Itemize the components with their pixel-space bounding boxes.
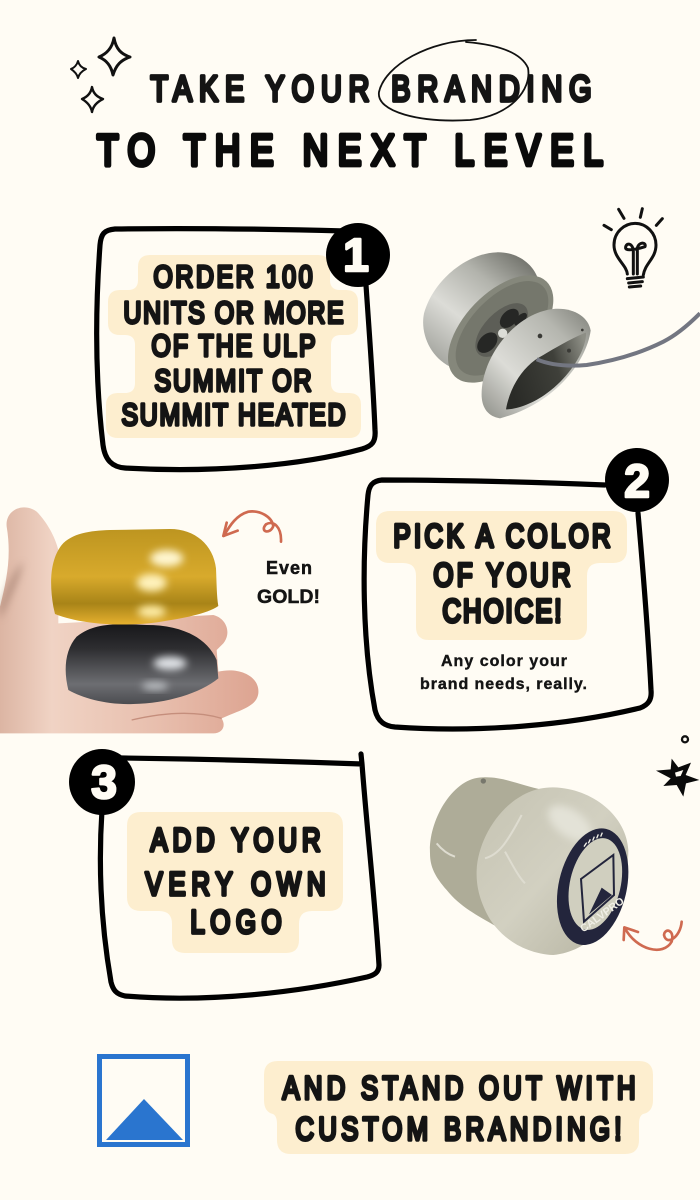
- step 2 text: OF YOUR: [434, 558, 571, 594]
- caption: even gold: Even: [266, 558, 312, 578]
- panel: step 3: [69, 749, 379, 998]
- text highlight: step 3: [127, 812, 343, 953]
- step 1 text: UNITS OR MORE: [124, 295, 344, 330]
- title: TO THE NEXT LEVEL: [97, 126, 603, 175]
- step 1 text: SUMMIT HEATED: [122, 397, 346, 432]
- step 3 text: [146, 823, 326, 941]
- number badge 2: [605, 448, 669, 512]
- icon: sparkles: [71, 38, 130, 112]
- step 1 text: OF THE ULP: [152, 328, 316, 363]
- icon: star and dot: [656, 736, 699, 797]
- step 2 text: [394, 519, 611, 630]
- step 2 text: PICK A COLOR: [394, 519, 611, 555]
- step 1 outline: [97, 229, 375, 470]
- panel: step 1: [97, 223, 390, 470]
- step 3 text: VERY OWN: [146, 867, 325, 903]
- arrow: to gold yoyo: [223, 511, 281, 542]
- step 2 caption: [420, 653, 587, 693]
- number badge 1: 1: [343, 229, 369, 281]
- step 2 caption: brand needs, really.: [420, 676, 587, 693]
- step 2 outline: [364, 480, 651, 729]
- number badge 3: [69, 749, 135, 815]
- closing message text: AND STAND OUT WITH: [282, 1071, 636, 1107]
- step 2 text: CHOICE!: [442, 594, 562, 630]
- text highlight: closing message: [264, 1061, 653, 1154]
- caption: even gold: [257, 558, 320, 608]
- logo: blue square with triangle: [100, 1056, 188, 1144]
- icon: lightbulb: [604, 209, 662, 287]
- closing message text: [282, 1071, 636, 1148]
- caption: even gold: GOLD!: [257, 586, 320, 608]
- image: disassembled yoyo with cable: [423, 252, 700, 418]
- step 1 text: ORDER 100: [154, 259, 313, 294]
- number badge 3: 3: [91, 756, 117, 808]
- arrow: to logo: [624, 922, 682, 950]
- title: TAKE YOUR BRANDING: [150, 68, 592, 109]
- image: hand holding gold and black yoyo: [0, 507, 258, 733]
- step 1 text: [122, 259, 346, 432]
- step 3 outline: [100, 754, 379, 998]
- number badge 1: [326, 223, 390, 287]
- step 3 text: LOGO: [190, 905, 282, 941]
- number badge 2: 2: [624, 455, 650, 507]
- callout: closing message: [264, 1061, 653, 1154]
- closing message text: CUSTOM BRANDING!: [296, 1112, 621, 1148]
- hand-drawn circle around BRANDING: [379, 40, 528, 120]
- panel: step 2: [364, 448, 669, 729]
- step 3 text: ADD YOUR: [150, 823, 320, 859]
- title: [97, 68, 603, 175]
- text highlight: step 1: [106, 255, 361, 438]
- image: branded yoyo with logo: [430, 777, 639, 955]
- step 2 caption: Any color your: [441, 653, 567, 670]
- step 1 text: SUMMIT OR: [154, 363, 312, 398]
- text highlight: step 2: [376, 511, 627, 640]
- image: branded yoyo with logo: CALVPRO: [578, 895, 627, 935]
